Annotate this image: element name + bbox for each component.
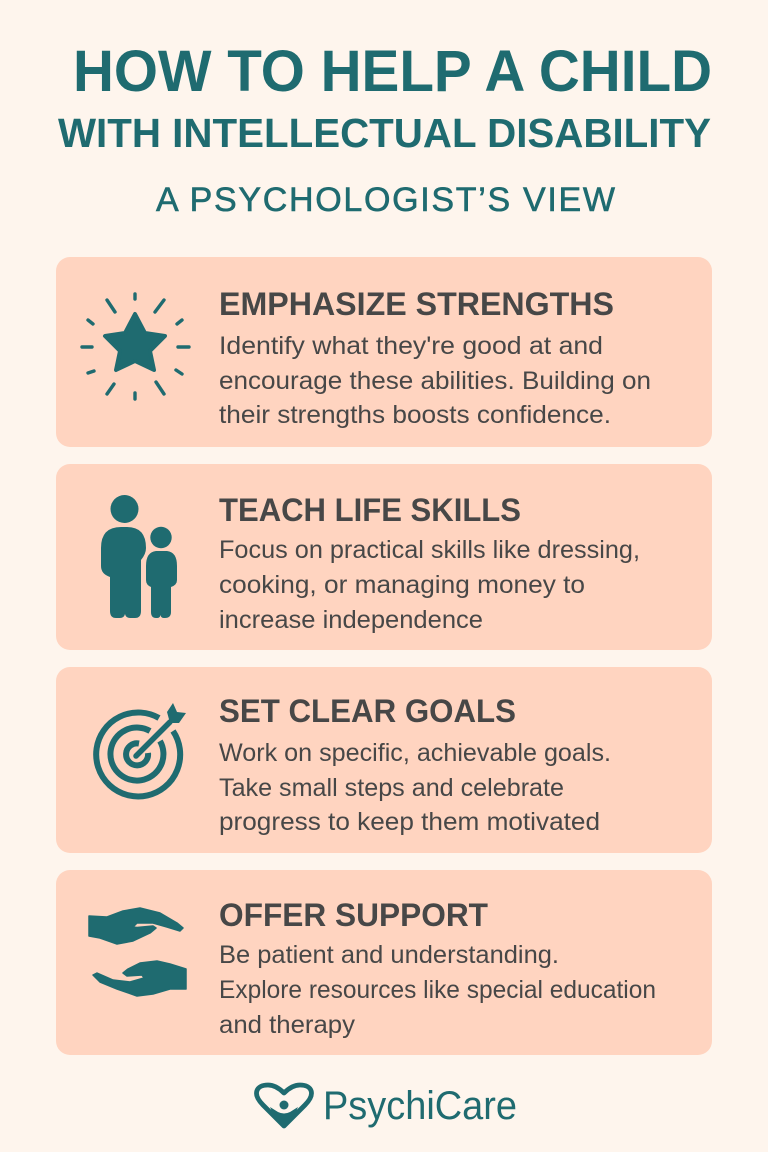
body text: Take small steps and celebrate [219,774,564,802]
wordmark: PsychiCare [323,1084,517,1128]
icon: heart with figure [257,1085,311,1127]
body text: Focus on practical skills like dressing, [219,536,640,564]
body text: Be patient and understanding. [219,941,559,969]
subtitle: A PSYCHOLOGIST’S VIEW [156,181,615,219]
heading: OFFER SUPPORT [219,897,488,933]
body text: Identify what they're good at and [219,332,603,360]
body text [219,941,656,1039]
body text: their strengths boosts confidence. [219,401,611,429]
heading: SET CLEAR GOALS [219,693,516,729]
icon: target with arrow [96,703,186,796]
heading: EMPHASIZE STRENGTHS [219,286,614,322]
panel: emphasize strengths [56,257,712,447]
panel: offer support [56,870,712,1055]
heading: TEACH LIFE SKILLS [219,492,521,528]
panel: set clear goals [56,667,712,853]
body text: cooking, or managing money to [219,571,585,599]
body text: Explore resources like special education [219,976,656,1004]
title: WITH INTELLECTUAL DISABILITY [58,110,711,156]
icon: star [82,294,189,399]
icon: adult and child [101,495,177,618]
body text: encourage these abilities. Building on [219,367,651,395]
body text [219,536,640,634]
body text [219,332,651,429]
title: HOW TO HELP A CHILD [73,39,712,104]
panel: teach life skills [56,464,712,650]
body text: increase independence [219,606,483,634]
body text: and therapy [219,1011,356,1039]
title [58,39,712,156]
icon: caring hands [89,908,186,996]
body text: progress to keep them motivated [219,808,600,836]
body text: Work on specific, achievable goals. [219,739,611,767]
logo: PsychiCare [257,1084,517,1128]
body text [219,739,611,836]
